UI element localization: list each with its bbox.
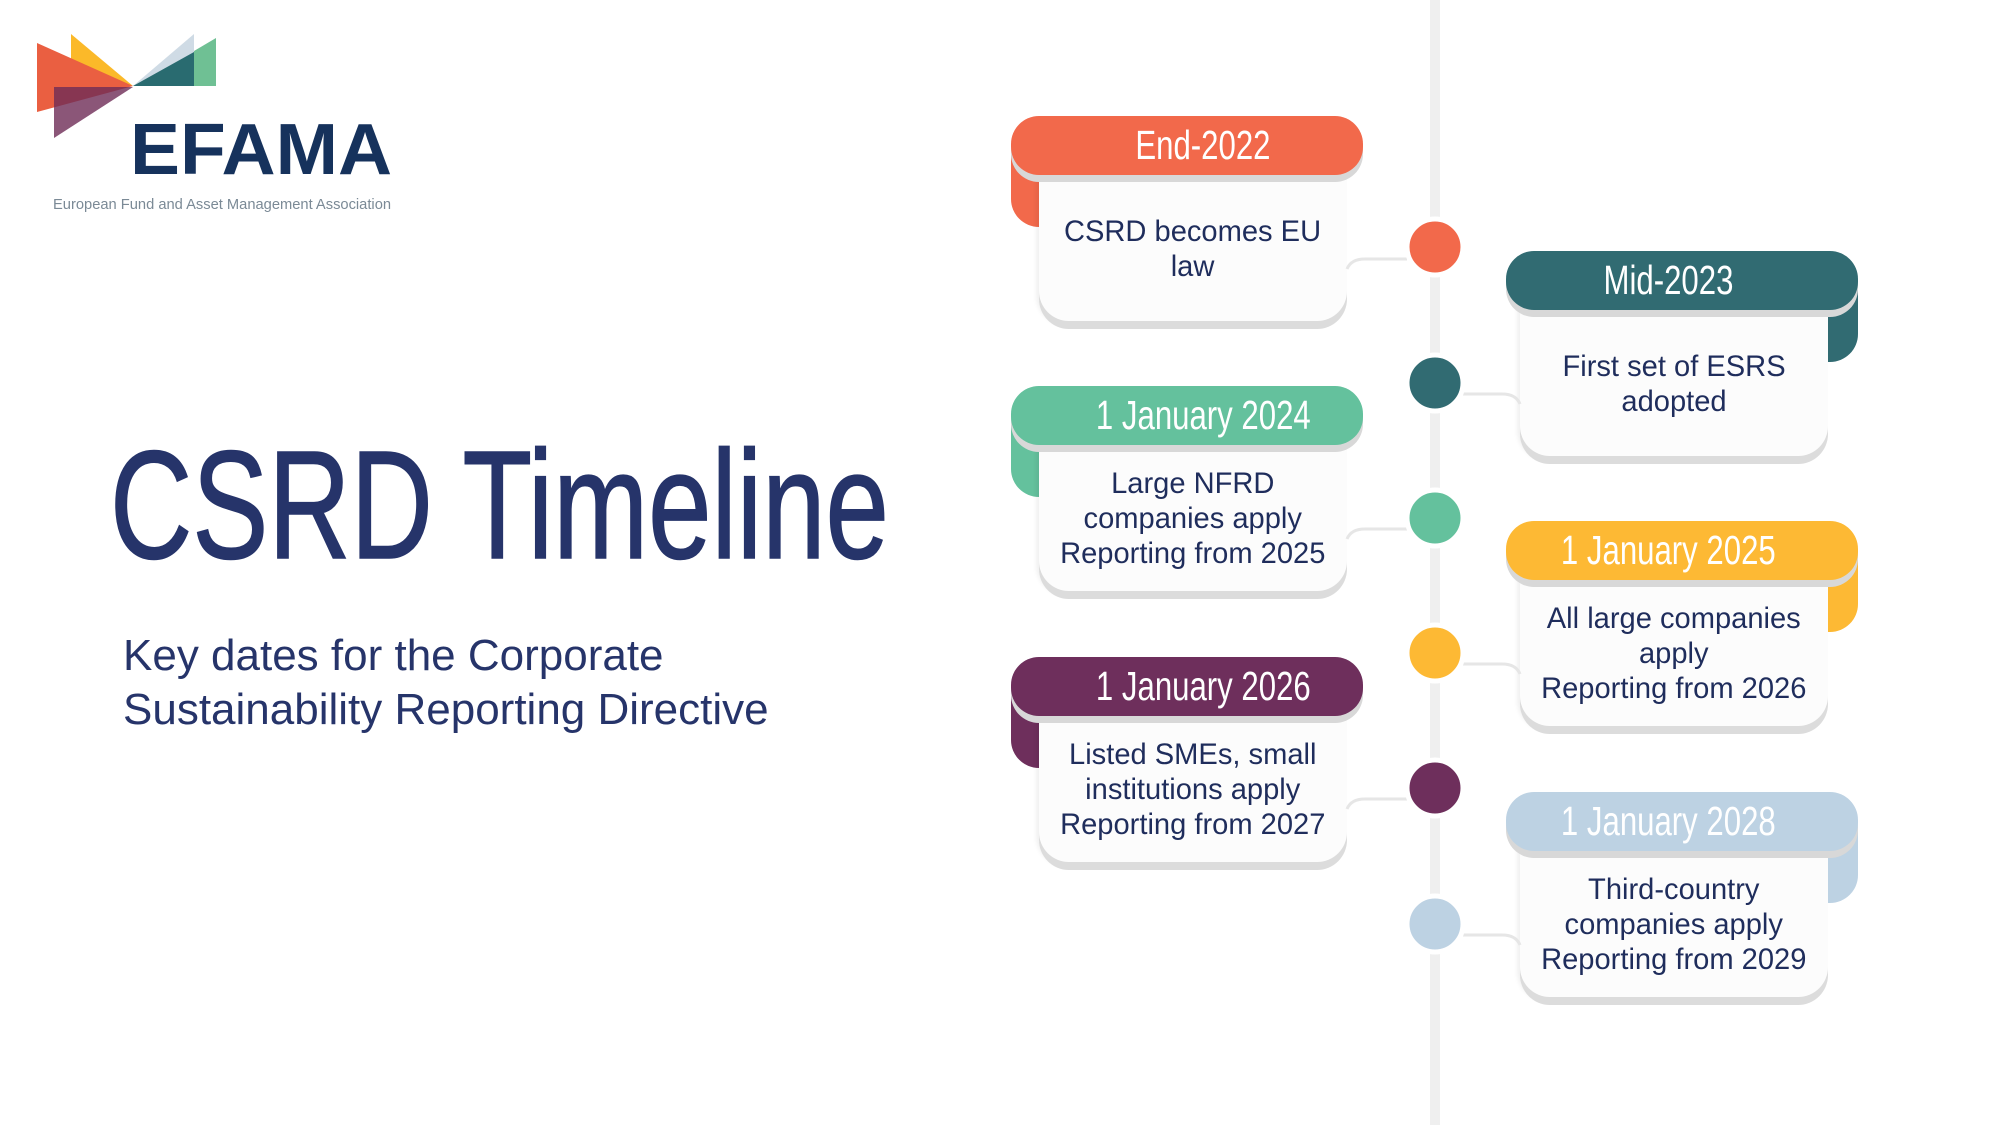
text: Large NFRD: Reporting from 2025: [1060, 537, 1326, 570]
dot: End-2022: [1407, 219, 1463, 275]
header: 1 January 2028: 1 January 2028: [1561, 798, 1775, 844]
text: Listed SMEs: institutions apply: [1085, 773, 1301, 806]
text: First set of ESRS adopted: First set of ESRS: [1562, 350, 1786, 382]
dot: Mid-2023: [1407, 355, 1463, 411]
text: Large NFRD: companies apply: [1084, 502, 1302, 535]
header: Mid-2023: Mid-2023: [1603, 257, 1733, 303]
card: Mid-2023: [1506, 251, 1858, 464]
card: End-2022: [1011, 116, 1363, 329]
text: Listed SMEs: Reporting from 2027: [1060, 808, 1326, 841]
icon: logo triangles: [37, 34, 216, 138]
text: All large companies: Reporting from 2026: [1541, 672, 1807, 705]
title: CSRD Timeline: [110, 419, 889, 591]
text: Third-country: [1520, 842, 1828, 997]
dot: 2025: [1407, 625, 1463, 681]
header: 1 January 2025: [1506, 521, 1858, 580]
card: 1 January 2025: [1506, 521, 1858, 734]
logo: EFAMA: [37, 34, 392, 213]
text: Large NFRD: [1039, 436, 1347, 591]
header: End-2022: [1011, 116, 1363, 175]
tagline: European Fund and Asset Management Association: [53, 197, 391, 213]
text: Third-country: companies apply: [1565, 908, 1783, 941]
card: 1 January 2024: [1011, 386, 1363, 599]
dot: 2026: [1407, 760, 1463, 816]
header: 1 January 2026: [1011, 657, 1363, 716]
subtitle: Sustainability Reporting Directive: [123, 685, 769, 734]
dot: 2028: [1407, 896, 1463, 952]
card: 1 January 2028: [1506, 792, 1858, 1005]
text: All large companies: [1520, 571, 1828, 726]
card: 1 January 2026: [1011, 657, 1363, 870]
timeline vertical line: [1430, 0, 1440, 1125]
header: Mid-2023: [1506, 251, 1858, 310]
subtitle: [123, 631, 769, 734]
EFAMA wordmark: EFAMA: [130, 110, 392, 190]
header: 1 January 2025: 1 January 2025: [1561, 527, 1775, 573]
header: End-2022: End-2022: [1135, 122, 1271, 168]
header: 1 January 2028: [1506, 792, 1858, 851]
header: 1 January 2026: 1 January 2026: [1096, 663, 1310, 709]
text: Third-country: Third-country: [1588, 873, 1760, 906]
text: CSRD becomes EU law: CSRD becomes EU: [1064, 214, 1322, 248]
header: 1 January 2024: 1 January 2024: [1096, 392, 1310, 438]
text: First set of ESRS adopted: adopted: [1621, 384, 1727, 418]
text: Listed SMEs: Listed SMEs, small: [1069, 738, 1317, 771]
text: All large companies: apply: [1639, 637, 1709, 670]
text: CSRD becomes EU law: [1039, 166, 1347, 321]
text: All large companies: All large companies: [1547, 602, 1801, 635]
dot: 2024: [1407, 490, 1463, 546]
text: CSRD becomes EU law: law: [1171, 250, 1215, 282]
text: First set of ESRS adopted: [1520, 301, 1828, 456]
header: 1 January 2024: [1011, 386, 1363, 445]
subtitle: Key dates for the Corporate: [123, 631, 664, 680]
text: Third-country: Reporting from 2029: [1541, 943, 1807, 976]
text: Large NFRD: Large NFRD: [1111, 467, 1275, 500]
text: Listed SMEs: [1039, 707, 1347, 862]
